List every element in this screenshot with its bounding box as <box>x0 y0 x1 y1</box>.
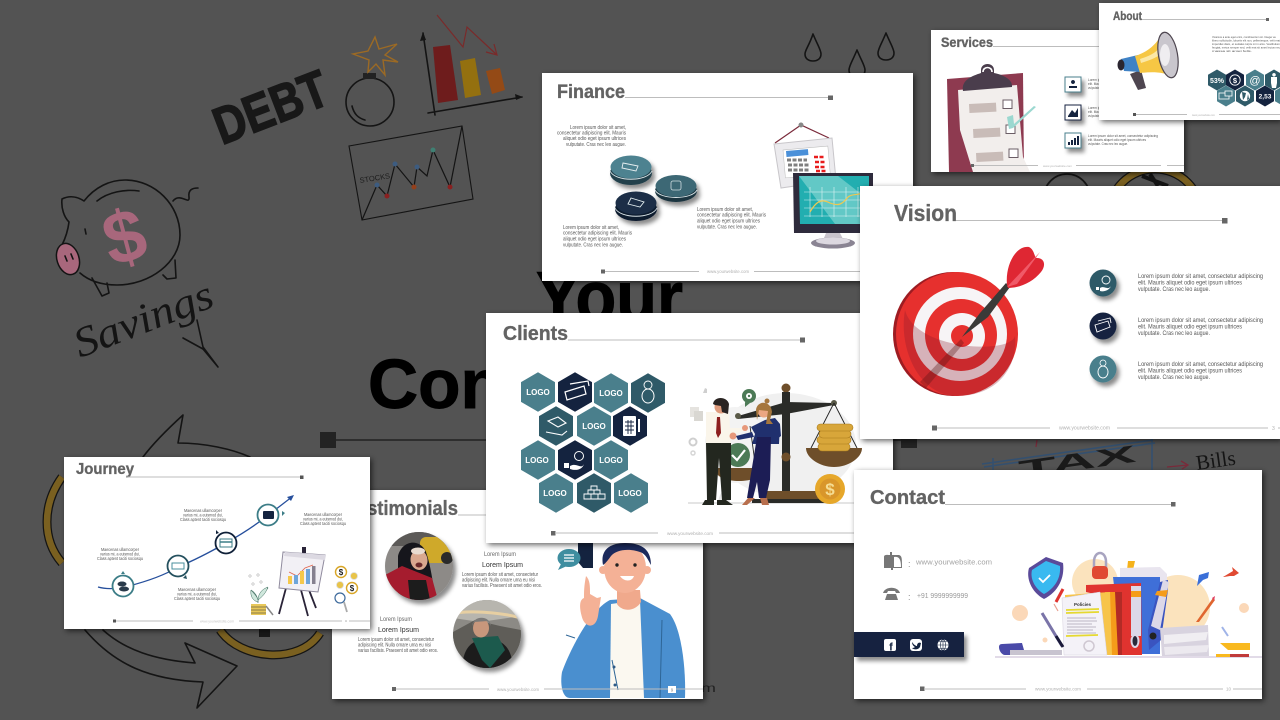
testimonials footer: 9 <box>671 688 674 692</box>
journey node two <box>168 556 188 579</box>
journey text two: Maecenas ullamcorper <box>184 508 223 513</box>
vision footer <box>932 426 1280 432</box>
sketch: circular arrows <box>47 415 320 708</box>
testimonial two text <box>358 616 438 654</box>
journey node three <box>216 530 236 554</box>
about paragraph <box>1212 35 1280 53</box>
vision row one: vulputate. Cras nec leo augue. <box>1138 286 1210 293</box>
vision row three <box>1090 356 1263 382</box>
testimonial one text: Lorem ipsum dolor sit amet, consectetur <box>462 572 538 578</box>
hexagon logo grid: LOGO <box>599 456 623 465</box>
finance text top: vulputate. Cras nec leo augue. <box>566 142 626 148</box>
contact footer: www.yourwebsite.com <box>1035 686 1081 692</box>
hexagon logo grid: LOGO <box>543 489 567 498</box>
sketch: coin ring <box>1044 169 1201 261</box>
figure: woman <box>730 398 781 505</box>
finance footer <box>601 269 870 274</box>
finance text top: consectetur adipiscing elit. Mauris <box>557 130 626 136</box>
journey text two <box>180 508 227 522</box>
cover website text: www.yourwebsite.com <box>539 681 716 695</box>
journey text two: varius mi, a euismod dui, <box>183 512 223 518</box>
illustration: man pointing up with speech bubble <box>558 543 685 698</box>
sketch: falling bar chart <box>420 15 523 115</box>
website contact row <box>884 552 992 570</box>
icon: megaphone <box>1118 31 1181 90</box>
cover heading: Your: Your <box>536 258 683 338</box>
contact footer: 10 <box>1226 686 1232 692</box>
testimonials footer <box>392 686 703 693</box>
icon: dartboard target with dart <box>893 247 1044 396</box>
journey footer <box>113 620 370 624</box>
testimonial one text: Lorem Ipsum <box>482 560 523 569</box>
icon: monitor with line chart <box>793 173 873 248</box>
journey heading: Journey <box>76 461 134 478</box>
about footer <box>1133 113 1280 117</box>
hexagon logo grid: LOGO <box>599 389 623 398</box>
panel: services <box>931 30 1184 172</box>
panel: journey <box>64 457 370 629</box>
services heading: Services <box>941 35 993 50</box>
finance text left: Lorem ipsum dolor sit amet, <box>563 225 619 231</box>
service row one: elit. Mauris aliquet <box>1088 82 1113 86</box>
journey footer: www.yourwebsite.com <box>200 620 234 624</box>
finance text left: consectetur adipiscing elit. Mauris <box>563 230 632 236</box>
about paragraph: massa sit amet felis. <box>1212 49 1252 53</box>
service row three <box>1065 133 1158 148</box>
sketch: tax board and bills <box>982 438 1237 484</box>
finance text left <box>563 225 632 248</box>
illustration: policy binders and security: Policies <box>1074 602 1092 607</box>
journey text four: Maecenas ullamcorper <box>178 587 217 592</box>
hexagon logo grid: LOGO <box>618 489 642 498</box>
icon: facebook: f <box>889 642 893 654</box>
cover heading: Content: Content <box>368 345 630 423</box>
vision row two: Lorem ipsum dolor sit amet, consectetur adipiscing <box>1138 317 1263 324</box>
service row three: vulputate. Cras nec leo augue. <box>1088 142 1128 146</box>
vision footer: 3 <box>1272 426 1275 432</box>
about hexagon stats: 2,53 <box>1259 94 1272 100</box>
testimonial two text: varius facilisis. Praesent sit amet odio eros. <box>358 648 438 654</box>
vision row one: Lorem ipsum dolor sit amet, consectetur adipiscing <box>1138 273 1263 280</box>
vision row three: elit. Mauris aliquet odio eget ipsum ultrices <box>1138 368 1242 374</box>
sketch: stocks chart: STOCKS <box>359 171 391 185</box>
journey node one <box>112 571 134 596</box>
finance text right: Lorem ipsum dolor sit amet, <box>697 207 753 213</box>
finance text right: aliquet odio eget ipsum ultrices <box>697 218 760 224</box>
testimonial one text: Lorem Ipsum <box>484 551 516 558</box>
about hexagon stats: 53% <box>1210 78 1225 85</box>
cover rule with square ends <box>320 432 917 448</box>
panel: testimonials <box>332 490 703 699</box>
testimonial two text: Lorem Ipsum <box>380 616 412 623</box>
finance text left: vulputate. Cras nec leo augue. <box>563 242 623 248</box>
sketch: debt: DEBT <box>206 60 337 156</box>
about heading: About <box>1113 11 1142 23</box>
finance text right: consectetur adipiscing elit. Mauris <box>697 212 766 218</box>
phone contact row: +91 9999999999 <box>917 593 968 600</box>
panel: vision <box>860 186 1280 439</box>
journey text four: Class aptent taciti sociosqu <box>174 596 221 601</box>
finance text top: aliquet odio eget ipsum ultrices <box>563 136 626 142</box>
panel: clients <box>486 313 893 543</box>
contact footer <box>920 686 1262 692</box>
finance text top <box>557 125 626 148</box>
sketch: tax board and bills: TAX <box>1017 441 1138 484</box>
journey text one: Maecenas ullamcorper <box>101 547 140 552</box>
panel: contact <box>854 470 1262 699</box>
about hexagon stats: $ <box>1233 76 1238 85</box>
sketch: piggy bank: $ <box>94 191 155 282</box>
testimonials heading: Testimonials <box>347 498 458 520</box>
photo: woman laughing <box>385 532 453 600</box>
finance text left: aliquet odio eget ipsum ultrices <box>563 236 626 242</box>
journey text one <box>97 547 144 561</box>
services footer <box>971 164 1184 168</box>
service row two: vulputate. Cras nec <box>1088 114 1113 118</box>
clients footer: www.yourwebsite.com <box>667 531 713 536</box>
hexagon logo grid <box>521 372 665 513</box>
illustration: coins and magnifier <box>335 566 358 612</box>
illustration: policy binders and security <box>995 553 1262 657</box>
testimonial one text: varius facilisis. Praesent sit amet odio eros. <box>462 583 542 589</box>
vision heading: Vision <box>894 200 957 226</box>
contact heading: Contact <box>870 486 945 509</box>
journey text two: Class aptent taciti sociosqu <box>180 517 227 522</box>
growth curve arrow <box>98 495 294 588</box>
icon: twitter <box>910 639 922 651</box>
vision row one: elit. Mauris aliquet odio eget ipsum ultrices <box>1138 280 1242 286</box>
journey text three: varius mi, a euismod dui, <box>303 516 343 522</box>
vision row two: elit. Mauris aliquet odio eget ipsum ultrices <box>1138 324 1242 330</box>
service row three: elit. Mauris aliquet odio eget ipsum ultrices <box>1088 138 1146 142</box>
finance heading: Finance <box>557 82 625 103</box>
icon: globe <box>938 640 948 650</box>
about hexagon stats <box>1208 70 1280 106</box>
journey text four: varius mi, a euismod dui, <box>177 592 217 596</box>
about hexagon stats: @ <box>1249 75 1261 87</box>
service row two <box>1065 105 1118 120</box>
finance text right: vulputate. Cras nec leo augue. <box>697 224 757 230</box>
clients footer <box>551 531 860 536</box>
finance footer: www.yourwebsite.com <box>707 269 749 274</box>
testimonial one text <box>462 551 542 589</box>
hexagon logo grid: LOGO <box>526 388 550 397</box>
website contact row: www.yourwebsite.com <box>915 558 992 566</box>
finance text top: Lorem ipsum dolor sit amet, <box>570 125 626 131</box>
vision footer: www.yourwebsite.com <box>1059 426 1110 432</box>
panel: finance <box>542 73 913 281</box>
illustration: handshake in front of balance scale: $ <box>825 480 835 499</box>
hexagon logo grid: LOGO <box>525 456 549 465</box>
photo: woman in green scarf <box>453 600 521 668</box>
service row three: Lorem ipsum dolor sit amet, consectetur adipiscing <box>1088 134 1158 138</box>
sketch: savings: Savings <box>67 272 220 367</box>
panel: about <box>1099 3 1280 120</box>
finance text right <box>697 207 766 230</box>
website contact row: : <box>908 559 911 569</box>
phone contact row <box>883 588 968 602</box>
icon: wall calendar <box>774 122 836 188</box>
service row two: elit. Mauris aliquet <box>1088 110 1113 114</box>
vision row two <box>1090 312 1263 340</box>
phone contact row: : <box>908 592 911 602</box>
illustration: coins and magnifier: $ <box>350 584 355 593</box>
sketch: tax board and bills: Bills <box>1194 446 1237 475</box>
testimonial two text: Lorem ipsum dolor sit amet, consectetur <box>358 637 434 643</box>
service row two: Lorem ipsum dolor sit <box>1088 106 1118 110</box>
testimonial two text: Lorem Ipsum <box>378 625 419 634</box>
journey text four <box>174 587 221 601</box>
vision row one <box>1090 270 1263 296</box>
icon: clipboard checklist <box>947 64 1036 172</box>
illustration: coins and magnifier: $ <box>339 568 344 577</box>
illustration: handshake in front of balance scale <box>688 384 868 505</box>
illustration: plant in coins <box>249 574 273 615</box>
vision row three: vulputate. Cras nec leo augue. <box>1138 374 1210 381</box>
sketch: water drops <box>805 33 894 78</box>
social media bar <box>854 632 964 657</box>
illustration: presentation easel with bar chart <box>279 547 326 616</box>
sketch: stocks chart <box>349 126 473 220</box>
vision row two: vulputate. Cras nec leo augue. <box>1138 330 1210 337</box>
sketch: bomb <box>346 37 398 126</box>
vision row three: Lorem ipsum dolor sit amet, consectetur adipiscing <box>1138 361 1263 368</box>
icon: three coins <box>610 156 697 221</box>
journey text three: Maecenas ullamcorper <box>304 512 343 517</box>
sketch: piggy bank <box>53 180 198 296</box>
services footer: www.yourwebsite.com <box>1043 164 1072 168</box>
hexagon logo grid: LOGO <box>582 422 606 431</box>
testimonial two text: adipiscing elit. Nulla ornare urna eu nisi <box>358 642 431 648</box>
about footer: www.yourwebsite.com <box>1192 113 1215 117</box>
figure: man <box>702 398 748 505</box>
journey text three: Class aptent taciti sociosqu <box>300 521 347 526</box>
journey text one: Class aptent taciti sociosqu <box>97 556 144 561</box>
clients heading: Clients <box>503 323 568 345</box>
testimonials footer: www.yourwebsite.com <box>497 687 539 692</box>
service row one <box>1065 77 1118 92</box>
testimonial one text: adipiscing elit. Nulla ornare urna eu nisi <box>462 578 535 584</box>
journey node four <box>258 504 285 526</box>
cover title <box>320 258 917 695</box>
service row one: Lorem ipsum dolor sit <box>1088 78 1118 82</box>
journey text one: varius mi, a euismod dui, <box>100 552 140 556</box>
service row one: vulputate. Cras nec <box>1088 86 1113 90</box>
journey text three <box>300 512 347 526</box>
